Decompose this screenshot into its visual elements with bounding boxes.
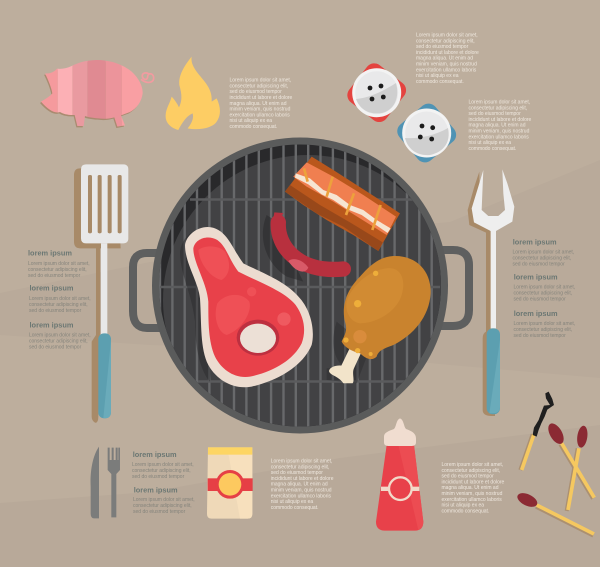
icon: knife and fork (91, 447, 120, 518)
text group: fork labels (512, 237, 575, 339)
text block: packet: Lorem ipsum dolor sit amet, (271, 458, 332, 464)
text group: fork labels: lorem ipsum (514, 309, 558, 318)
text block: ketchup (442, 462, 505, 514)
steak (180, 227, 313, 387)
text group: cutlery labels: sed do eiusmod tempor (133, 509, 186, 515)
text block: red shaker (416, 32, 479, 85)
text block: red shaker: Lorem ipsum dolor sit amet, (416, 32, 478, 38)
icon: ketchup bottle (376, 418, 423, 531)
text block: ketchup: consectetur adipiscing elit, (442, 468, 500, 474)
text group: cutlery labels (132, 450, 195, 515)
text block: red shaker: incididunt ut labore et dolore (416, 50, 479, 56)
text group: spatula labels: lorem ipsum (28, 248, 72, 258)
text group: cutlery labels: sed do eiusmod tempor (132, 474, 185, 480)
text block: blue shaker: sed do eiusmod tempor (468, 111, 521, 117)
text block: ketchup: incididunt ut labore et dolore (442, 479, 505, 485)
text block: red shaker: commodo consequat. (416, 79, 464, 85)
text group: cutlery labels: consectetur adipiscing elit, (132, 468, 191, 474)
text block: flame: incididunt ut labore et dolore (230, 95, 293, 101)
text block: flame: commodo consequat. (230, 124, 277, 130)
text block: blue shaker: Lorem ipsum dolor sit amet, (468, 100, 530, 106)
text group: cutlery labels: lorem ipsum (133, 450, 177, 459)
text group: fork labels: consectetur adipiscing elit, (514, 290, 572, 296)
text group: fork labels: Lorem ipsum dolor sit amet, (514, 321, 575, 327)
text block: packet: nisi ut aliquip ex ea (271, 499, 313, 505)
text group: spatula labels (28, 248, 91, 350)
text group: fork labels: sed do eiusmod tempor (514, 296, 566, 302)
text group: spatula labels: Lorem ipsum dolor sit amet, (29, 332, 91, 338)
text group: spatula labels: lorem ipsum (30, 320, 74, 330)
icon: flame (166, 57, 220, 130)
text group: cutlery labels: Lorem ipsum dolor sit amet, (133, 497, 195, 503)
text block: blue shaker: commodo consequat. (468, 146, 516, 152)
text block: flame: Lorem ipsum dolor sit amet, (230, 78, 291, 84)
text group: fork labels: Lorem ipsum dolor sit amet, (514, 284, 575, 290)
text group: fork labels: sed do eiusmod tempor (514, 333, 566, 339)
text block: flame: minim veniam, quis nostrud (230, 107, 291, 113)
icon: matches (515, 392, 594, 536)
text block: ketchup: magna aliqua. Ut enim ad (442, 485, 499, 491)
text group: spatula labels: sed do eiusmod tempor (29, 308, 82, 314)
text group: spatula labels: consectetur adipiscing elit, (29, 338, 88, 344)
text block: ketchup: Lorem ipsum dolor sit amet, (442, 462, 503, 468)
text group: spatula labels: lorem ipsum (30, 284, 74, 292)
text block: packet: sed do eiusmod tempor (271, 470, 323, 476)
text block: blue shaker: nisi ut aliquip ex ea (468, 140, 511, 146)
food items (180, 157, 431, 387)
text group: spatula labels: consectetur adipiscing elit, (29, 302, 88, 308)
text block: flame: sed do eiusmod tempor (230, 89, 282, 95)
text block: ketchup: sed do eiusmod tempor (442, 474, 494, 480)
text block: blue shaker: exercitation ullamco laboris (468, 134, 529, 140)
text group: fork labels: Lorem ipsum dolor sit amet, (512, 249, 574, 255)
text group: cutlery labels: Lorem ipsum dolor sit amet, (132, 462, 194, 468)
text block: packet: commodo consequat. (271, 505, 319, 511)
text block: ketchup: nisi ut aliquip ex ea (442, 503, 484, 509)
text block: blue shaker: consectetur adipiscing elit, (468, 105, 527, 111)
text group: fork labels: consectetur adipiscing elit, (514, 327, 572, 333)
icon: carving fork (468, 169, 514, 416)
text block: red shaker: nisi ut aliquip ex ea (416, 73, 459, 79)
text group: cutlery labels: lorem ipsum (134, 486, 178, 494)
text group: fork labels: consectetur adipiscing elit, (512, 255, 571, 261)
text group: spatula labels: Lorem ipsum dolor sit amet, (29, 296, 91, 302)
chart: grill (152, 138, 453, 445)
text group: fork labels: lorem ipsum (514, 272, 558, 282)
text block: packet: magna aliqua. Ut enim ad (271, 482, 328, 488)
text block: flame: nisi ut aliquip ex ea (230, 118, 272, 124)
text block: flame: consectetur adipiscing elit, (230, 83, 288, 89)
icon: pig (38, 57, 154, 130)
text block: blue shaker: magna aliqua. Ut enim ad (468, 123, 526, 129)
text block: blue shaker: minim veniam, quis nostrud (468, 128, 530, 134)
text block: ketchup: exercitation ullamco laboris (442, 497, 502, 503)
text block: packet: incididunt ut labore et dolore (271, 476, 334, 482)
text block: packet: minim veniam, quis nostrud (271, 488, 332, 494)
text group: cutlery labels: consectetur adipiscing elit, (133, 503, 192, 509)
text block: red shaker: magna aliqua. Ut enim ad (416, 56, 473, 62)
text block: red shaker: sed do eiusmod tempor (416, 44, 469, 50)
text group: spatula labels: sed do eiusmod tempor (28, 273, 81, 279)
icon: salt shaker red (344, 60, 410, 126)
chicken drumstick (327, 256, 431, 383)
text block: red shaker: minim veniam, quis nostrud (416, 62, 477, 68)
text block: packet: consectetur adipiscing elit, (271, 464, 329, 470)
icon: pepper shaker blue (394, 100, 460, 166)
text block: flame: magna aliqua. Ut enim ad (230, 101, 287, 107)
text block: packet (271, 458, 334, 511)
sausage (263, 212, 349, 282)
icon: grill handles (133, 250, 469, 328)
text block: flame (230, 78, 293, 130)
bacon (285, 157, 400, 251)
icon: spice packet (207, 447, 253, 519)
text block: blue shaker: incididunt ut labore et dolore (468, 117, 532, 123)
text block: ketchup: commodo consequat. (442, 508, 489, 514)
text group: spatula labels: Lorem ipsum dolor sit amet, (28, 261, 90, 267)
text group: spatula labels: sed do eiusmod tempor (29, 344, 82, 350)
icon: spatula (74, 164, 128, 423)
text block: packet: exercitation ullamco laboris (271, 493, 332, 499)
text group: spatula labels: consectetur adipiscing elit, (28, 267, 87, 273)
text block: ketchup: minim veniam, quis nostrud (442, 491, 503, 497)
text group: fork labels: lorem ipsum (513, 237, 557, 246)
text block: red shaker: exercitation ullamco laboris (416, 67, 477, 73)
text block: red shaker: consectetur adipiscing elit, (416, 38, 475, 44)
text block: flame: exercitation ullamco laboris (230, 112, 290, 118)
text block: blue shaker (468, 100, 532, 152)
text group: fork labels: sed do eiusmod tempor (512, 261, 565, 267)
